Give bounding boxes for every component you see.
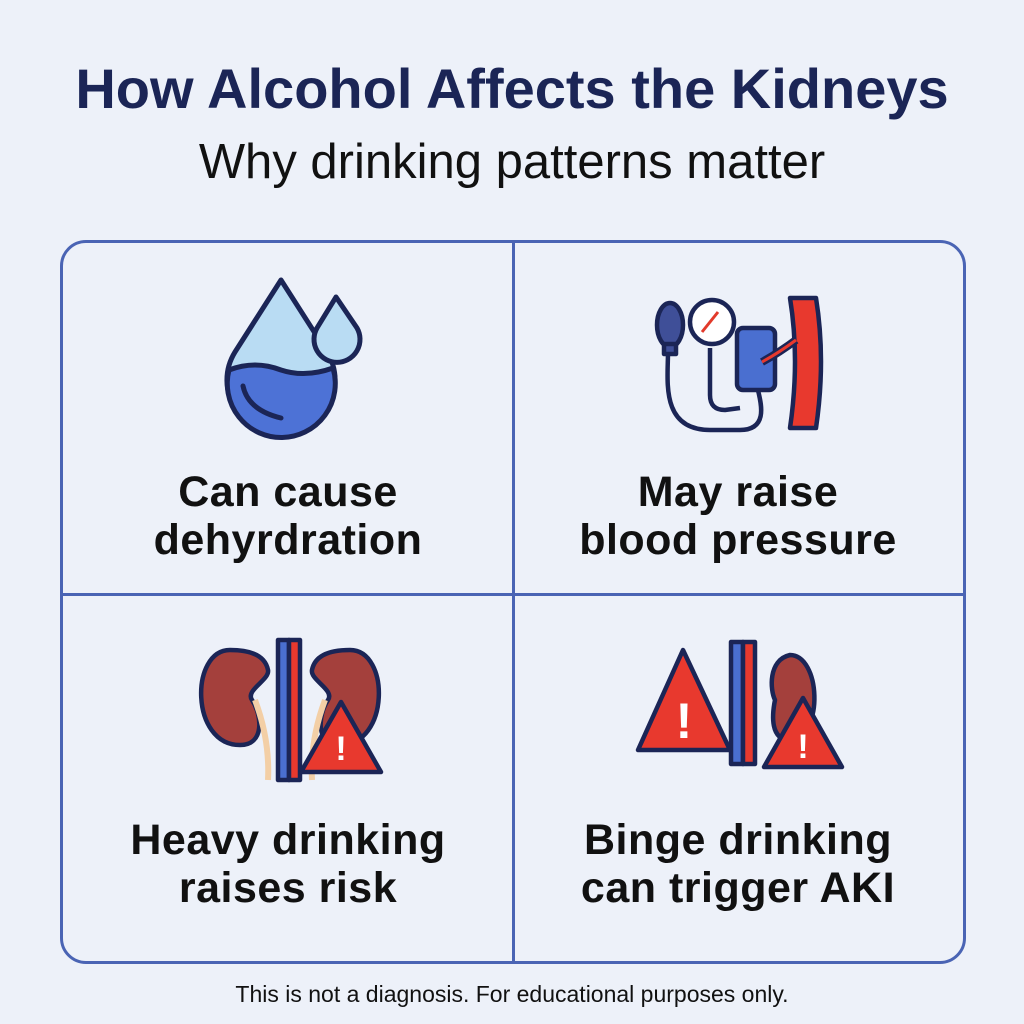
- label: blood pressure: May raise: [638, 468, 838, 516]
- label: dehydration: [154, 468, 422, 564]
- title: How Alcohol Affects the Kidneys: [75, 57, 949, 120]
- footer disclaimer: This is not a diagnosis. For educational purposes only.: [235, 981, 789, 1007]
- grid panel: [60, 240, 966, 964]
- label: heavy drinking: Heavy drinking: [130, 816, 446, 864]
- icon: water drops: [227, 280, 360, 438]
- label: binge drinking: [581, 816, 895, 912]
- icon: kidneys with warning: [201, 640, 381, 780]
- label: dehydration: Can cause: [178, 468, 398, 516]
- label: blood pressure: [579, 468, 897, 564]
- label: heavy drinking: raises risk: [179, 864, 397, 912]
- icon: kidneys with warning: !: [335, 730, 347, 768]
- label: binge drinking: Binge drinking: [584, 816, 892, 864]
- label: binge drinking: can trigger AKI: [581, 864, 895, 912]
- icon: kidney AKI warnings: [638, 642, 842, 767]
- icon: kidney AKI warnings: !: [797, 728, 809, 766]
- subtitle: Why drinking patterns matter: [199, 135, 825, 189]
- label: heavy drinking: [130, 816, 446, 912]
- icon: blood pressure: [657, 298, 821, 430]
- label: blood pressure: blood pressure: [579, 516, 897, 564]
- label: dehydration: dehyrdration: [154, 516, 422, 564]
- icon: kidney AKI warnings: !: [676, 693, 692, 749]
